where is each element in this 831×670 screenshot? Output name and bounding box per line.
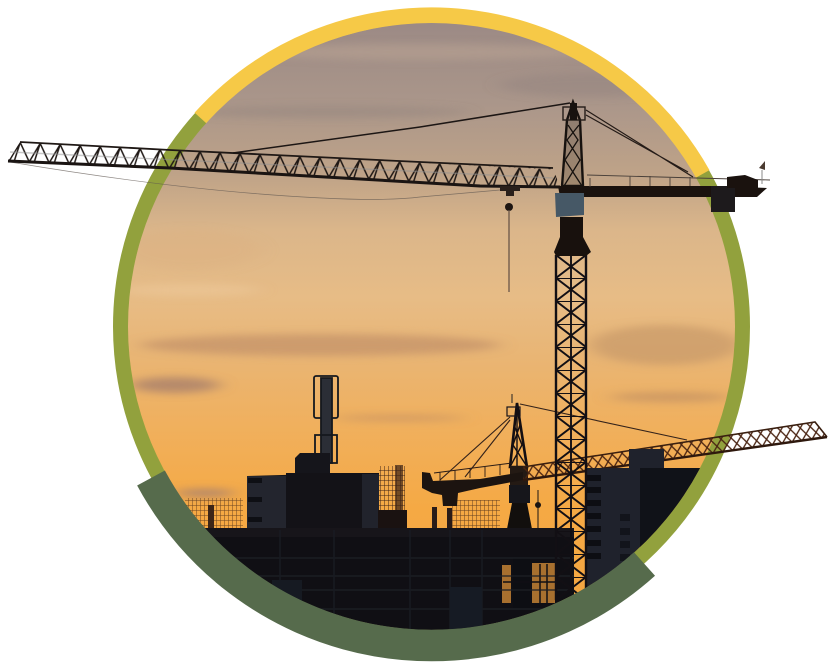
trolley — [500, 186, 520, 196]
jib lattice — [8, 142, 560, 187]
backstay cables — [586, 110, 693, 177]
scaffolding centre — [452, 500, 500, 530]
base building — [204, 528, 574, 640]
photo: sunset sky — [120, 16, 745, 641]
railing — [434, 463, 512, 481]
right tower block — [585, 449, 700, 640]
crane one: mast — [556, 255, 586, 600]
machinery — [727, 175, 758, 188]
counter jib deck — [558, 186, 767, 197]
slewing unit — [554, 217, 591, 256]
counterweight — [711, 186, 735, 212]
glow openings — [502, 563, 555, 603]
crane two: counter jib and boom — [422, 422, 827, 506]
hook block — [505, 203, 513, 292]
counter jib — [422, 472, 523, 506]
building: centre block — [247, 453, 379, 530]
crane two: mast — [507, 394, 532, 529]
flag — [759, 161, 765, 184]
ring: yellow segment — [200, 15, 702, 174]
railing — [587, 175, 770, 187]
ring: dark green segment — [151, 478, 644, 646]
crane one: upper structure — [8, 102, 770, 292]
crane two: cables — [440, 404, 687, 480]
ring: olive segment — [121, 16, 742, 637]
buildings in front — [204, 255, 700, 640]
cab — [555, 193, 584, 217]
building: pump tower — [314, 376, 338, 463]
boom lattice — [523, 422, 827, 480]
jib tie cable — [233, 103, 570, 153]
poles — [432, 507, 452, 529]
scaffolding on right of block — [378, 465, 407, 530]
crane two: hook — [535, 490, 541, 529]
tower head — [562, 102, 583, 186]
scaffolding left — [185, 498, 243, 529]
sag cable — [10, 162, 500, 199]
jib chords — [20, 142, 553, 168]
boom chords — [523, 422, 827, 467]
clouds — [120, 44, 740, 497]
